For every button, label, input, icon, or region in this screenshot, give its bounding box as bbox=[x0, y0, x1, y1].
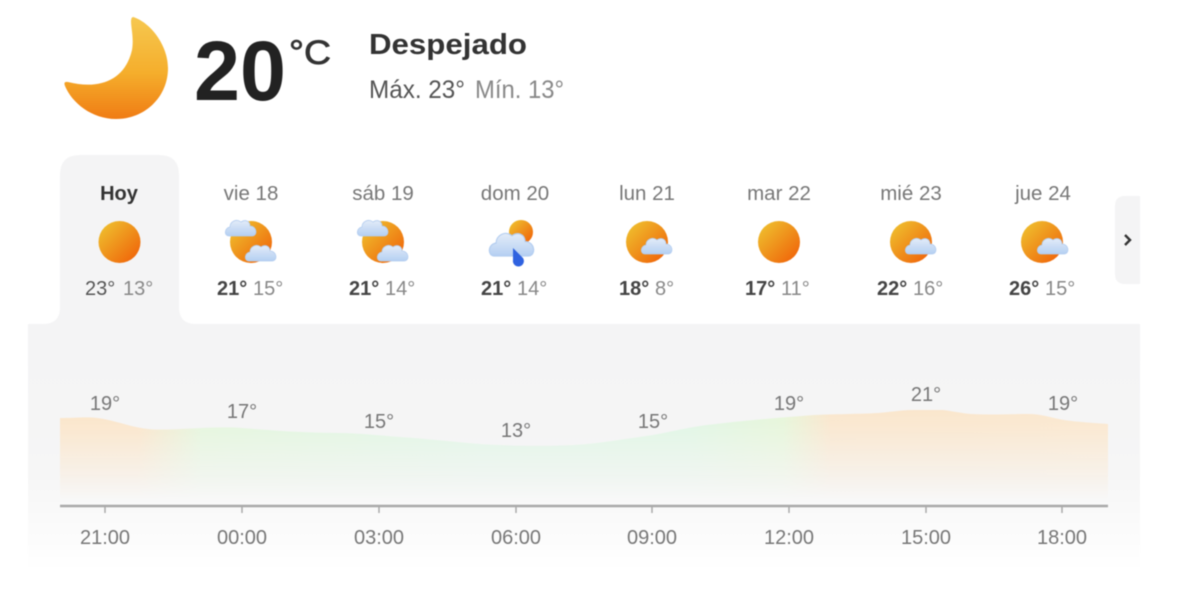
temperature labels bbox=[90, 384, 1078, 442]
day: sáb 19 bbox=[349, 182, 415, 300]
temperature labels: 17° bbox=[227, 401, 257, 423]
current temperature bbox=[194, 24, 331, 118]
day: Hoy: 23° bbox=[85, 278, 115, 300]
arrow: next button bbox=[1115, 196, 1140, 284]
day: mar 22: 17° bbox=[745, 278, 775, 300]
day: sáb 19: sáb 19 bbox=[352, 182, 414, 205]
time labels: 00:00 bbox=[217, 527, 267, 549]
day: dom 20: 21° bbox=[481, 278, 511, 300]
day: sáb 19: 21° bbox=[349, 278, 379, 300]
day: jue 24: 15° bbox=[1045, 278, 1075, 300]
time labels bbox=[80, 527, 1087, 549]
day: lun 21 bbox=[619, 182, 675, 300]
day: mié 23: 16° bbox=[913, 278, 943, 300]
max and min temperature: Mín. 13° bbox=[475, 76, 564, 104]
area chart: hourly temperature bbox=[60, 410, 1108, 485]
day: vie 18: 21° bbox=[217, 278, 247, 300]
temperature labels: 21° bbox=[911, 384, 941, 406]
day: lun 21: 18° bbox=[619, 278, 649, 300]
time labels: 06:00 bbox=[491, 527, 541, 549]
time labels: 21:00 bbox=[80, 527, 130, 549]
temperature labels: 15° bbox=[638, 411, 668, 433]
day: Hoy: Hoy bbox=[100, 183, 139, 205]
day: mar 22: mar 22 bbox=[747, 182, 811, 205]
day: dom 20: 14° bbox=[517, 278, 547, 300]
day: mié 23 bbox=[877, 182, 943, 300]
panel: active day tab bbox=[43, 155, 196, 324]
day: mar 22 bbox=[745, 182, 811, 300]
temperature labels: 19° bbox=[1048, 393, 1078, 415]
temperature labels: 19° bbox=[774, 393, 804, 415]
day: jue 24 bbox=[1009, 182, 1075, 300]
day: dom 20: dom 20 bbox=[481, 182, 549, 205]
condition heading: Despejado bbox=[369, 29, 527, 61]
time labels: 15:00 bbox=[901, 527, 951, 549]
day: jue 24: 26° bbox=[1009, 278, 1039, 300]
day: Hoy bbox=[85, 183, 153, 300]
day: mié 23: mié 23 bbox=[880, 182, 942, 205]
day: vie 18 bbox=[217, 182, 283, 300]
day: dom 20 bbox=[481, 182, 549, 300]
icon: moon bbox=[64, 17, 168, 119]
day: lun 21: lun 21 bbox=[619, 182, 675, 205]
temperature labels: 15° bbox=[364, 411, 394, 433]
day: mar 22: 11° bbox=[781, 278, 810, 300]
day: lun 21: 8° bbox=[655, 278, 674, 300]
time labels: 03:00 bbox=[354, 527, 404, 549]
day: Hoy: 13° bbox=[123, 278, 153, 300]
panel: forecast background bbox=[28, 324, 1140, 570]
max and min temperature bbox=[369, 76, 564, 104]
max and min temperature: Máx. 23° bbox=[369, 76, 465, 104]
time labels: 09:00 bbox=[627, 527, 677, 549]
chart axis bbox=[60, 506, 1108, 513]
day: jue 24: jue 24 bbox=[1014, 182, 1071, 205]
temperature labels: 13° bbox=[501, 420, 531, 442]
day: mié 23: 22° bbox=[877, 278, 907, 300]
time labels: 18:00 bbox=[1037, 527, 1087, 549]
time labels: 12:00 bbox=[764, 527, 814, 549]
day: sáb 19: 14° bbox=[385, 278, 415, 300]
temperature labels: 19° bbox=[90, 393, 120, 415]
day: vie 18: 15° bbox=[253, 278, 283, 300]
current temperature: 20 bbox=[194, 24, 286, 118]
day: vie 18: vie 18 bbox=[224, 182, 278, 205]
current temperature: °C bbox=[289, 34, 331, 72]
